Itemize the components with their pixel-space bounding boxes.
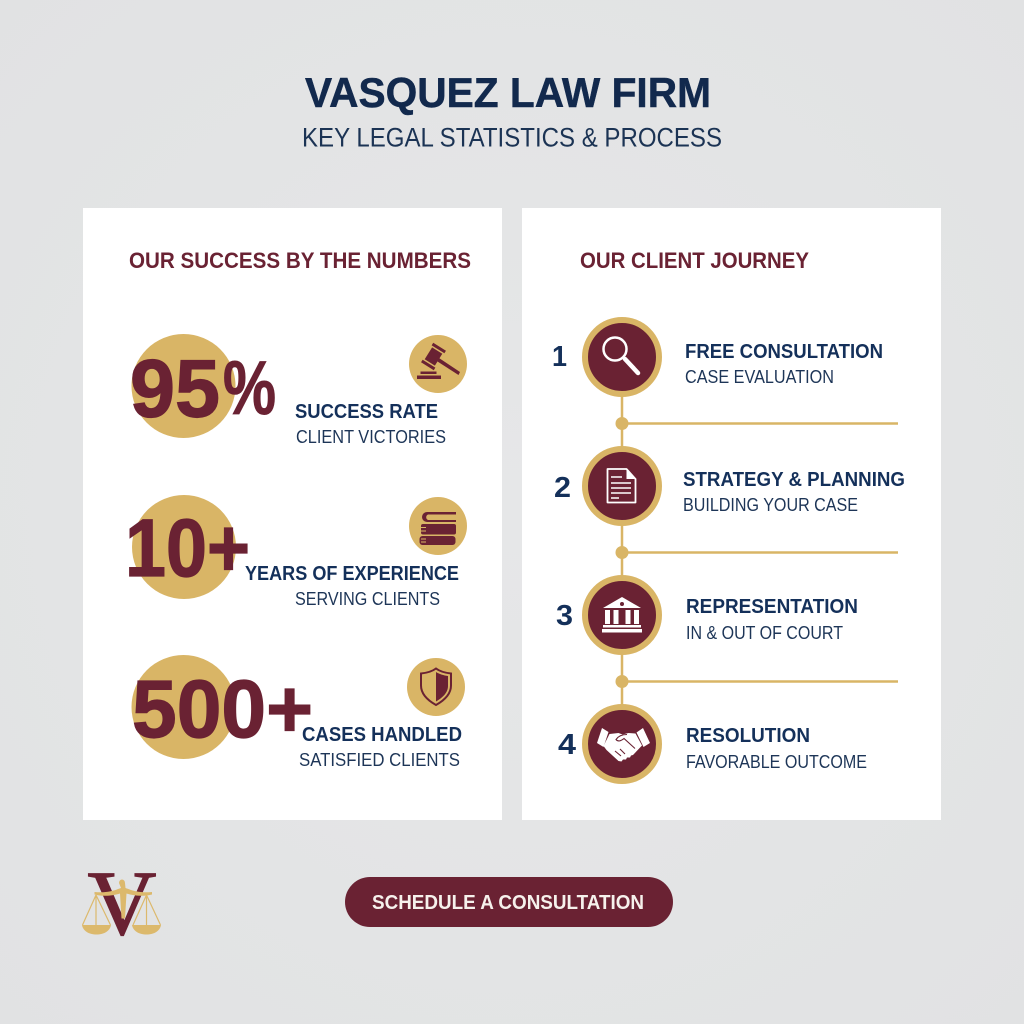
label: strategy and planning: STRATEGY & PLANNING <box>683 468 905 491</box>
icon: gavel <box>409 335 467 393</box>
number: 10+: 10+ <box>125 503 250 594</box>
heading: journey: OUR CLIENT JOURNEY <box>580 248 809 273</box>
step 1 <box>552 320 883 394</box>
sublabel: serving clients: SERVING CLIENTS <box>295 588 440 609</box>
sublabel: satisfied clients: SATISFIED CLIENTS <box>299 749 460 770</box>
stat: 500+ cases <box>132 655 465 770</box>
timeline connector <box>616 357 898 744</box>
icon: document <box>585 449 659 523</box>
label: free consultation: FREE CONSULTATION <box>685 340 883 363</box>
icon: courthouse <box>585 578 659 652</box>
icon: shield <box>407 658 465 716</box>
subtitle: KEY LEGAL STATISTICS & PROCESS <box>302 122 722 152</box>
number: 95%: 95 <box>130 344 220 434</box>
step 3 <box>556 578 858 652</box>
icon: handshake <box>585 707 659 781</box>
title: VASQUEZ LAW FIRM <box>305 69 711 116</box>
panel: our success by the numbers <box>83 208 502 820</box>
number 1: 1 <box>552 341 567 373</box>
step 4 <box>558 707 867 781</box>
logo: V with scales: V <box>88 852 156 954</box>
number 2: 2 <box>554 472 571 504</box>
label: cases handled: CASES HANDLED <box>302 723 462 746</box>
icon: books <box>409 497 467 555</box>
step 2 <box>554 449 905 523</box>
stat: 95% success rate <box>130 334 467 447</box>
panel: our client journey <box>522 208 941 820</box>
number: 500+: 500+ <box>132 664 313 755</box>
label: success rate: SUCCESS RATE <box>295 400 438 423</box>
heading: success: OUR SUCCESS BY THE NUMBERS <box>129 248 471 273</box>
button: schedule a consultation <box>345 877 673 927</box>
sublabel: building your case: BUILDING YOUR CASE <box>683 494 858 515</box>
number: 95% <box>130 344 276 434</box>
label: resolution: RESOLUTION <box>686 724 810 747</box>
sublabel: client victories: CLIENT VICTORIES <box>296 426 446 447</box>
number: 95%: % <box>223 346 276 431</box>
label: representation: REPRESENTATION <box>686 595 858 618</box>
number 3: 3 <box>556 600 573 632</box>
button: schedule a consultation: SCHEDULE A CONSULTATION <box>372 892 644 914</box>
stat: 10+ years <box>125 495 467 609</box>
label: years of experience: YEARS OF EXPERIENCE <box>245 562 459 585</box>
sublabel: case evaluation: CASE EVALUATION <box>685 366 834 387</box>
icon: magnifier <box>585 320 659 394</box>
sublabel: in and out of court: IN & OUT OF COURT <box>686 622 843 643</box>
sublabel: favorable outcome: FAVORABLE OUTCOME <box>686 751 867 772</box>
number 4: 4 <box>558 729 576 761</box>
